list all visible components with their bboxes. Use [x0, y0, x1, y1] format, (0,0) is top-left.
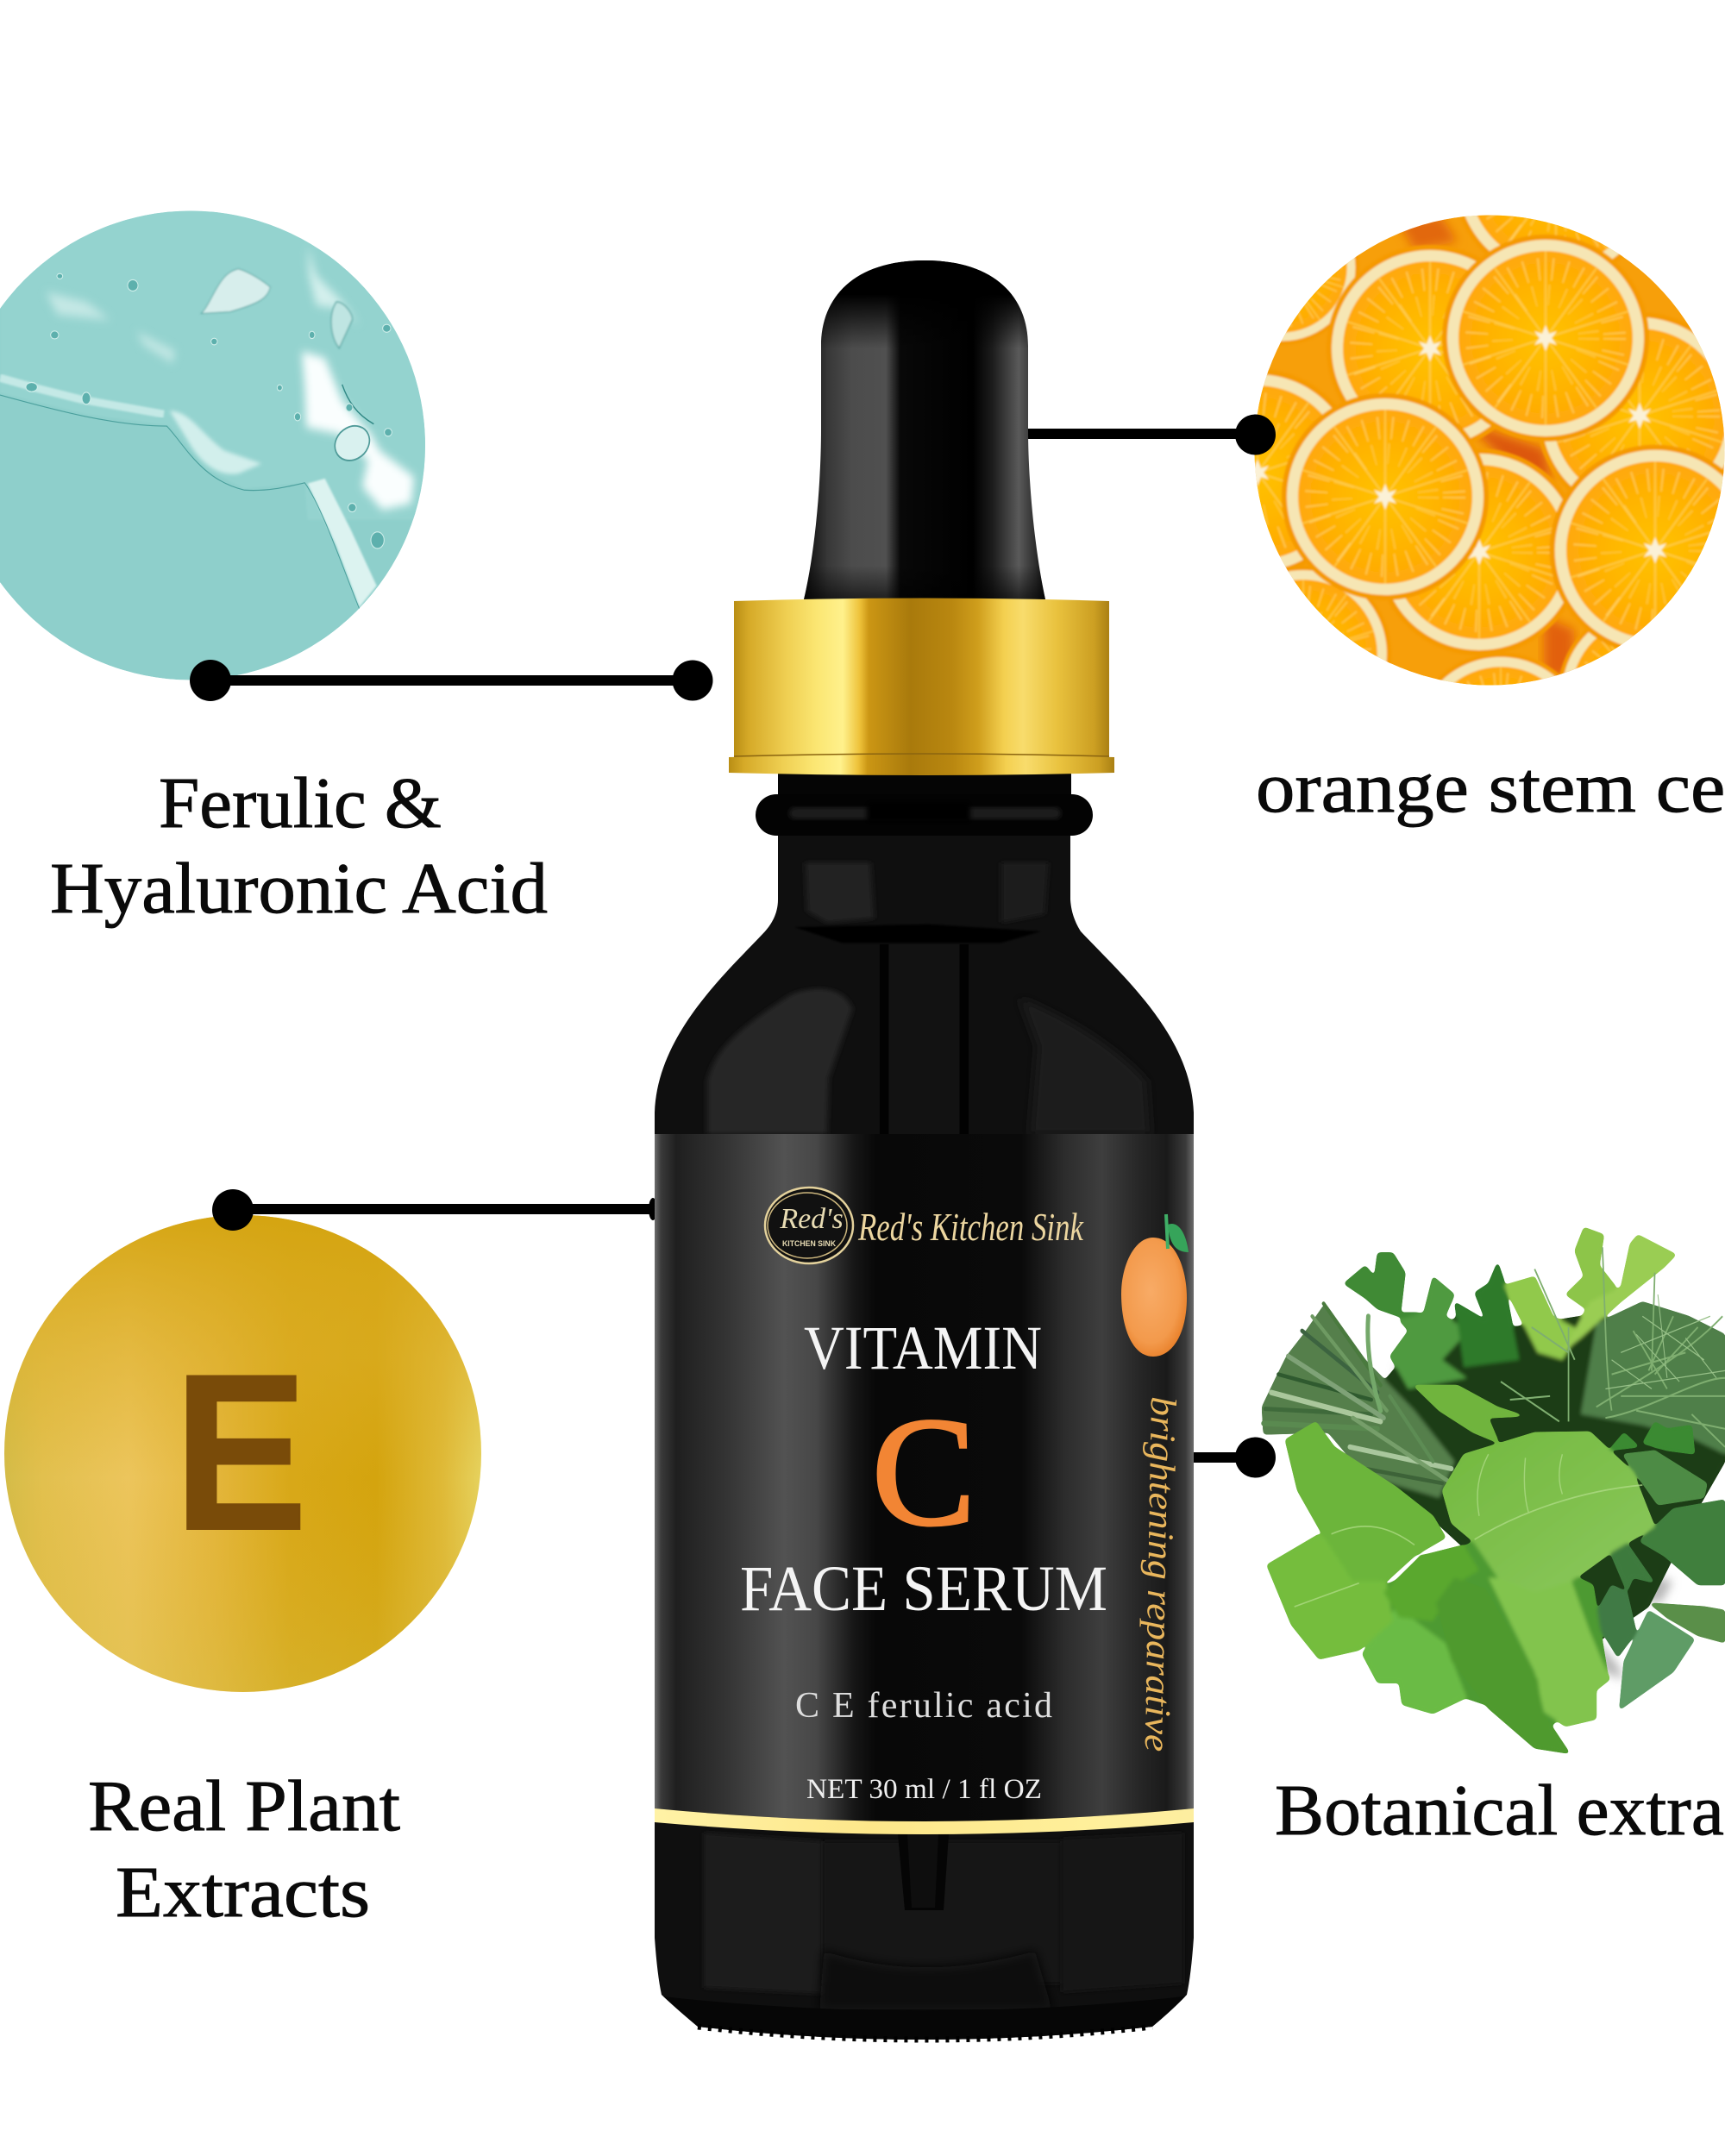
bottle glass body — [647, 759, 1199, 2061]
brand logo oval: Red's — [779, 1203, 844, 1235]
caption: real plant extracts: Real Plant — [88, 1766, 400, 1846]
panel: vitamin E gold circle — [4, 1215, 481, 1692]
label panel — [655, 1134, 1194, 1834]
dot: hyaluronic circle — [190, 660, 231, 701]
dot: orange stem cells — [1235, 414, 1276, 455]
caption: real plant extracts: Extracts — [116, 1852, 370, 1933]
vertical tagline: brightening reparative — [1137, 1396, 1182, 1752]
dot: gold collar — [673, 661, 712, 700]
orange fruit icon — [1121, 1214, 1189, 1357]
brand name: Red's Kitchen Sink — [857, 1205, 1084, 1249]
caption: ferulic and hyaluronic acid — [50, 763, 548, 929]
connector: ferulic and hyaluronic acid to collar — [210, 675, 693, 686]
bottle neck ring — [756, 768, 1093, 836]
title: big C: C — [872, 1386, 975, 1557]
connector: botanical extracts to bottle — [1190, 1452, 1256, 1463]
net volume: NET 30 ml / 1 fl OZ — [806, 1774, 1042, 1805]
caption: ferulic and hyaluronic acid: Ferulic & — [159, 763, 442, 843]
dot: vitamin E circle — [212, 1189, 254, 1231]
connector: real plant extracts to bottle — [233, 1204, 656, 1214]
letter E: E — [174, 1329, 307, 1577]
caption: real plant extracts — [88, 1766, 400, 1933]
brand logo oval — [765, 1188, 853, 1263]
title: vitamin: VITAMIN — [804, 1313, 1042, 1382]
connector end bump — [649, 1198, 657, 1220]
panel: orange slices circle — [1254, 216, 1725, 685]
dropper bulb — [804, 260, 1045, 599]
dot: botanical extracts — [1235, 1437, 1276, 1478]
gold band — [655, 1808, 1194, 1834]
title: face serum: FACE SERUM — [740, 1553, 1107, 1625]
brand logo oval: KITCHEN SINK — [782, 1239, 836, 1249]
base teeth — [698, 2027, 1152, 2040]
bottle with dropper — [647, 260, 1199, 2061]
connector: orange stem cells to dropper bulb — [1025, 429, 1258, 439]
panel: hyaluronic gel circle — [0, 210, 431, 680]
caption: ferulic and hyaluronic acid: Hyaluronic Acid — [50, 849, 548, 929]
ingredient line: C E ferulic acid — [795, 1686, 1052, 1726]
gold collar — [729, 599, 1114, 775]
panel: herb bouquet — [1262, 1227, 1725, 1753]
